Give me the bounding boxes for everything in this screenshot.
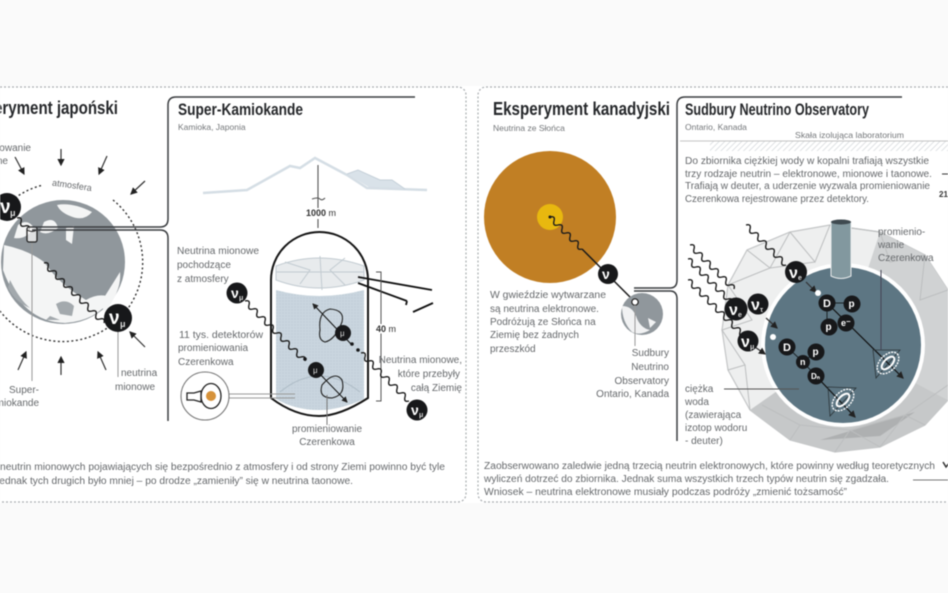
Cherenkov emission: upper [313,304,360,352]
label: atmospheric neutrinos: pochodzące [177,260,231,271]
deuterium reaction particles: electron neutrino: p [826,322,832,333]
neutrino path through Earth [17,218,104,323]
subheading: solar neutrinos: Neutrina ze Słońca [493,123,565,133]
neutrino symbol: Sun: ν [602,266,610,282]
flash points [770,290,821,340]
label: neutrinos through Earth: które przebyły [398,369,460,380]
subheading: Ontario: Ontario, Kanada [685,122,747,132]
neutrino symbol top: μ [10,208,16,218]
neutrino symbol top [0,193,21,221]
text: right conclusion [483,461,935,498]
particle bonds [787,303,852,376]
icon: Sun [484,151,616,283]
label: Sun text: Ziemię bez żadnych [490,330,579,341]
text: SNO description: trzy rodzaje neutrin – elektronowe, mionowe i taonowe. [685,169,932,180]
tank [271,232,368,416]
deuterium reaction particles: electron neutrino: p [848,299,855,310]
label: Sun text: są neutrina elektronowe. [490,304,599,315]
label: Sudbury [596,348,669,400]
label: Sudbury: Ontario, Kanada [596,389,669,400]
text: left conclusion: jednak tych drugich było mniej – po drodze „zamieniły” się w neutrina taonowe. [0,476,353,487]
incoming neutrino waves [688,225,786,340]
margin marks [939,174,948,199]
icon: detector location [27,227,37,242]
leader: heavy water [724,388,799,390]
leader: Super-Kamiokande [31,240,33,381]
Cherenkov emission: lower [303,357,347,402]
icon: Earth [1,200,125,324]
label: Sun text [490,290,606,355]
geodesic dome [722,225,948,452]
label: heavy water: woda [684,397,709,408]
pipe [358,277,433,312]
label: heavy water: (zawierająca [685,410,742,421]
text: right conclusion: Zaobserwowano zaledwie jedną trzecią neutrin elektronowych, które powinny według teoretycznych [484,461,935,472]
icon: detector zoom [181,372,295,420]
label: atmospheric neutrinos: z atmosfery [177,274,229,285]
neutrino symbol bottom: ν [109,308,120,329]
label: muon neutrinos: neutrina [121,368,158,379]
neutrino symbol bottom: μ [120,319,126,329]
solar neutrino path [548,216,633,300]
neutrino path: through Earth [361,353,409,401]
neutrino particles: ν [741,334,750,351]
deuterium reaction particles: other neutrinos [778,338,824,384]
label: muon neutrinos [115,368,158,393]
label: Cherenkov radiation [292,424,362,448]
neutrino symbol right: ν [411,402,419,418]
Cherenkov pattern: upper [827,303,903,378]
label: detectors [178,330,264,368]
neutrino particles: μ [750,344,754,351]
leader: Cherenkov SNO [880,270,882,350]
neutrino particles [724,261,807,352]
neutrino particles: ν [789,265,798,282]
label: detectors: Czerenkowa [178,357,234,368]
label: Super-Kamiokande location: Super- [9,385,39,396]
panel: Japanese experiment [0,87,466,502]
label: heavy water: - deuter) [685,436,723,447]
neutrino symbol: Sun [598,264,618,284]
dimension bracket [376,272,381,401]
deuterium reaction particles: other neutrinos: n [800,357,806,367]
Cherenkov pattern: lower [816,376,858,417]
neutrino symbol left: μ [239,295,243,302]
label: Sun text: przeszkód [490,344,536,355]
connector to Super-Kamiokande [32,97,415,421]
subheading: location: Kamioka, Japonia [178,122,246,132]
text: SNO description [685,156,932,205]
deuterium reaction particles: other neutrinos: Dₙ [811,372,820,381]
neutrino symbol bottom [104,304,132,332]
label: heavy water [684,384,747,447]
neutrino particles: e [798,275,802,282]
label: heavy water: izotop wodoru [685,423,747,434]
mountain [203,158,427,193]
neutrino symbol right: μ [419,412,423,419]
heavy water sphere [765,267,921,423]
label: Cherenkov SNO: promienio- [878,227,925,238]
neutrino symbol top: ν [0,197,11,218]
Cherenkov emission: upper: μ [340,329,345,338]
neck of vessel [831,220,851,278]
label: atmospheric neutrinos: Neutrina mionowe [177,246,259,257]
label: Cherenkov SNO: Czerenkowa [878,253,934,264]
deuterium reaction particles: other neutrinos: D [783,342,791,354]
neutrino particles: ν [751,297,760,314]
label: Sudbury: Sudbury [632,348,669,359]
label: Sudbury: Neutrino [631,362,669,373]
label: Sudbury: Observatory [615,376,669,387]
short arrows into sphere [752,282,816,354]
neutrino particles: ν [729,302,738,319]
deuterium reaction particles: other neutrinos: p [812,347,819,358]
label: Cherenkov radiation: Czerenkowa [299,437,355,448]
leader: muon neutrinos [117,332,119,377]
label: Cherenkov SNO [877,227,934,264]
text: right conclusion: Wniosek – neutrina elektronowe musiały podczas podróży „zmienić tożsamość” [484,487,847,498]
label: atmospheric neutrinos [177,246,259,285]
neutrino path: atmospheric [245,301,305,361]
text: right conclusion: wyliczeń dotrzeć do zbiornika. Jednak suma wszystkich trzech typów neutrin się zgadzała. [483,474,889,485]
label: Cherenkov SNO: wanie [877,240,905,251]
label: cosmic radiation [0,143,31,167]
rock layer: Skała izolująca laboratorium [795,130,904,140]
label: neutrinos through Earth: całą Ziemię [411,383,462,394]
text: SNO description: Czerenkowa rejestrowane przez detektory. [685,194,869,205]
label: detectors: promieniowania [178,343,248,354]
label: detectors: 11 tys. detektorów [179,330,264,341]
label: Super-Kamiokande location [0,385,39,409]
atmosphere ring [0,185,143,342]
neutrino symbol left [226,282,248,304]
connector to SNO [634,97,902,441]
text: left conclusion [0,462,445,487]
label: atmosphere: atmosfera [51,178,93,193]
heading: Super-Kamiokande: Super-Kamiokande [178,101,303,119]
deuterium reaction particles: electron neutrino [818,294,860,336]
panel: Canadian experiment [478,87,948,502]
neutrino symbol right [406,400,428,420]
label: neutrinos through Earth [379,355,462,394]
rock layer [680,130,948,151]
deuterium reaction particles: electron neutrino: e⁻ [841,318,851,328]
label: neutrinos through Earth: Neutrina mionowe, [379,355,462,366]
neutrino particles: e [738,312,742,319]
text: SNO description: Do zbiornika ciężkiej wody w kopalni trafiają wszystkie [685,156,929,167]
label: depth: 1000 m [306,208,336,218]
text: SNO description: Trafiają w deuter, a uderzenie wyzwala promieniowanie [685,181,930,192]
depth line [312,165,325,228]
white ring [761,263,925,427]
arrows: incoming cosmic rays [15,149,145,375]
leader: Cherenkov radiation [326,395,328,425]
neutrino particles: τ [760,307,764,314]
neutrino symbol left: ν [231,285,239,301]
Cherenkov emission: lower: μ [313,366,318,375]
label: Cherenkov radiation: promieniowanie [292,424,362,435]
label: Sun text: Podróżują ze Słońca na [490,317,596,328]
label: 40 m: 40 m [376,324,396,334]
margin check mark [913,462,948,480]
heading: Canadian experiment: Eksperyment kanadyjski [493,99,670,119]
label: heavy water: ciężka [685,384,714,395]
label: muon neutrinos: mionowe [115,382,155,393]
text: left conclusion: neutrin mionowych pojawiających się bezpośrednio z atmosfery i od strony Ziemi powinno być tyle [0,462,445,473]
deuterium reaction particles: electron neutrino: D [823,298,831,310]
label: Sun text: W gwieździe wytwarzane [490,290,606,301]
heading: SNO: Sudbury Neutrino Observatory [685,101,870,119]
margin marks: 21 [939,190,948,199]
icon: small Earth [621,293,663,346]
